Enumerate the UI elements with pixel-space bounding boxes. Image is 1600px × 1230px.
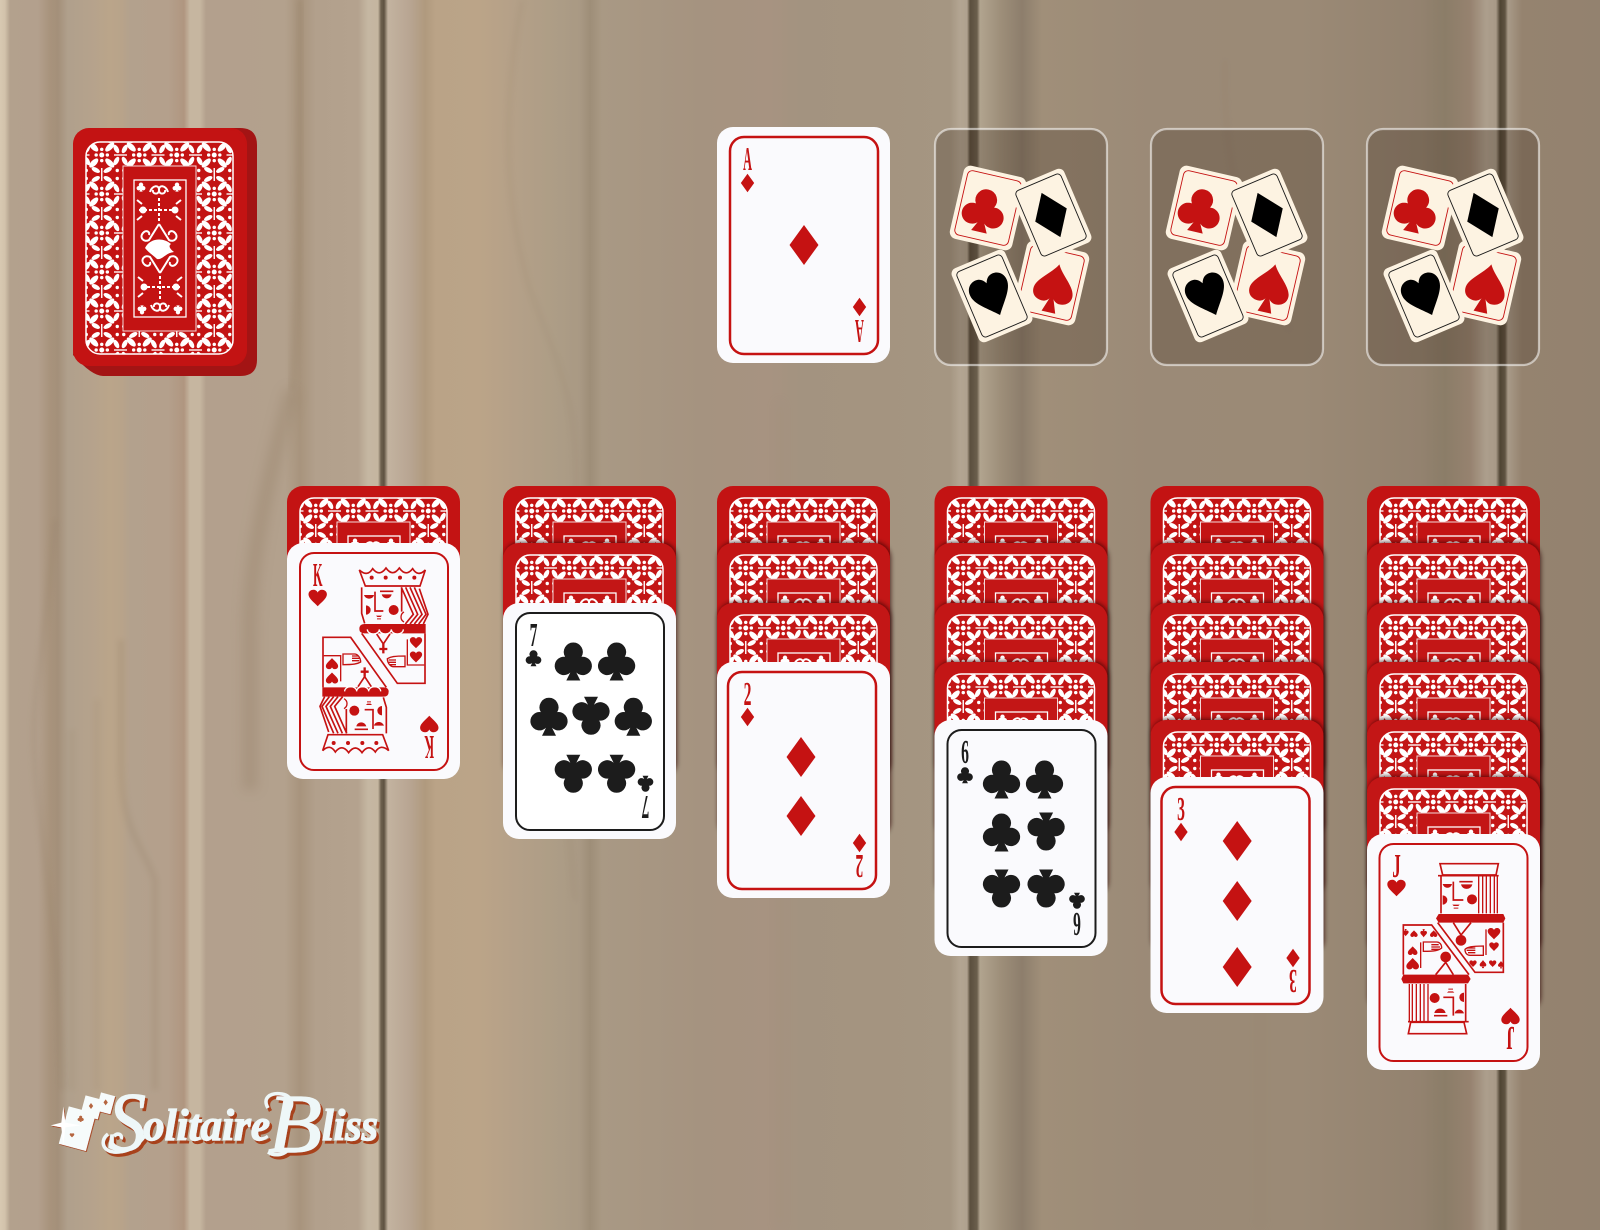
six of clubs card [934, 720, 1108, 956]
stock pile depth edge [73, 128, 257, 376]
seven of clubs card [503, 603, 676, 839]
diamond pips [1223, 821, 1252, 987]
foundation slot 3 [1151, 129, 1323, 365]
seven of clubs card: 7 [642, 788, 649, 827]
logo wordmark [103, 1076, 378, 1171]
foundation: ace of diamonds [717, 127, 890, 363]
logo wordmark: B [268, 1078, 322, 1171]
seven of clubs card: 7 [530, 615, 537, 654]
wood grain lines [34, 0, 1290, 1230]
three of diamonds card [1150, 777, 1324, 1013]
foundation slot 2 [935, 129, 1107, 365]
king of hearts card [287, 543, 460, 779]
two of diamonds card: 2 [856, 847, 863, 886]
tableau column 3: two of diamonds [717, 486, 890, 898]
six of clubs card: 6 [1073, 905, 1081, 944]
jack of hearts card [1367, 834, 1540, 1070]
foundation slot 4 [1367, 129, 1539, 365]
diamond pips [786, 737, 816, 836]
tableau column 1: king of hearts [287, 486, 460, 779]
logo wordmark: liss [322, 1101, 378, 1150]
inverted corner [853, 298, 866, 351]
king of hearts card: K [424, 728, 434, 767]
king figure [320, 568, 428, 753]
inverted corner: A [855, 312, 864, 351]
tableau column 2: seven of clubs [503, 486, 676, 839]
three of diamonds card: 3 [1177, 789, 1185, 828]
logo wordmark: S [108, 1076, 146, 1169]
three of diamonds card: 3 [1289, 962, 1297, 1001]
rank A: A [743, 139, 752, 178]
stock pile top card back [73, 128, 247, 366]
king of hearts card: K [313, 555, 323, 594]
six of clubs card: 6 [961, 732, 969, 771]
logo card fan icon [51, 1092, 115, 1151]
two of diamonds card: 2 [744, 674, 751, 713]
jack of hearts card: J [1506, 1019, 1515, 1057]
tableau column 6: jack of hearts [1367, 486, 1540, 1070]
club pips [530, 642, 652, 793]
tableau column 4: six of clubs [934, 486, 1108, 956]
club pips [983, 760, 1065, 908]
tableau column 5: three of diamonds [1150, 486, 1324, 1013]
jack of hearts card: J [1392, 847, 1401, 885]
jack figure [1401, 864, 1505, 1034]
two of diamonds card [717, 662, 890, 898]
logo: Solitaire Bliss [51, 1076, 378, 1171]
logo wordmark: olitaire [143, 1101, 270, 1150]
logo swashes [103, 1094, 292, 1155]
stock pile [73, 128, 257, 376]
